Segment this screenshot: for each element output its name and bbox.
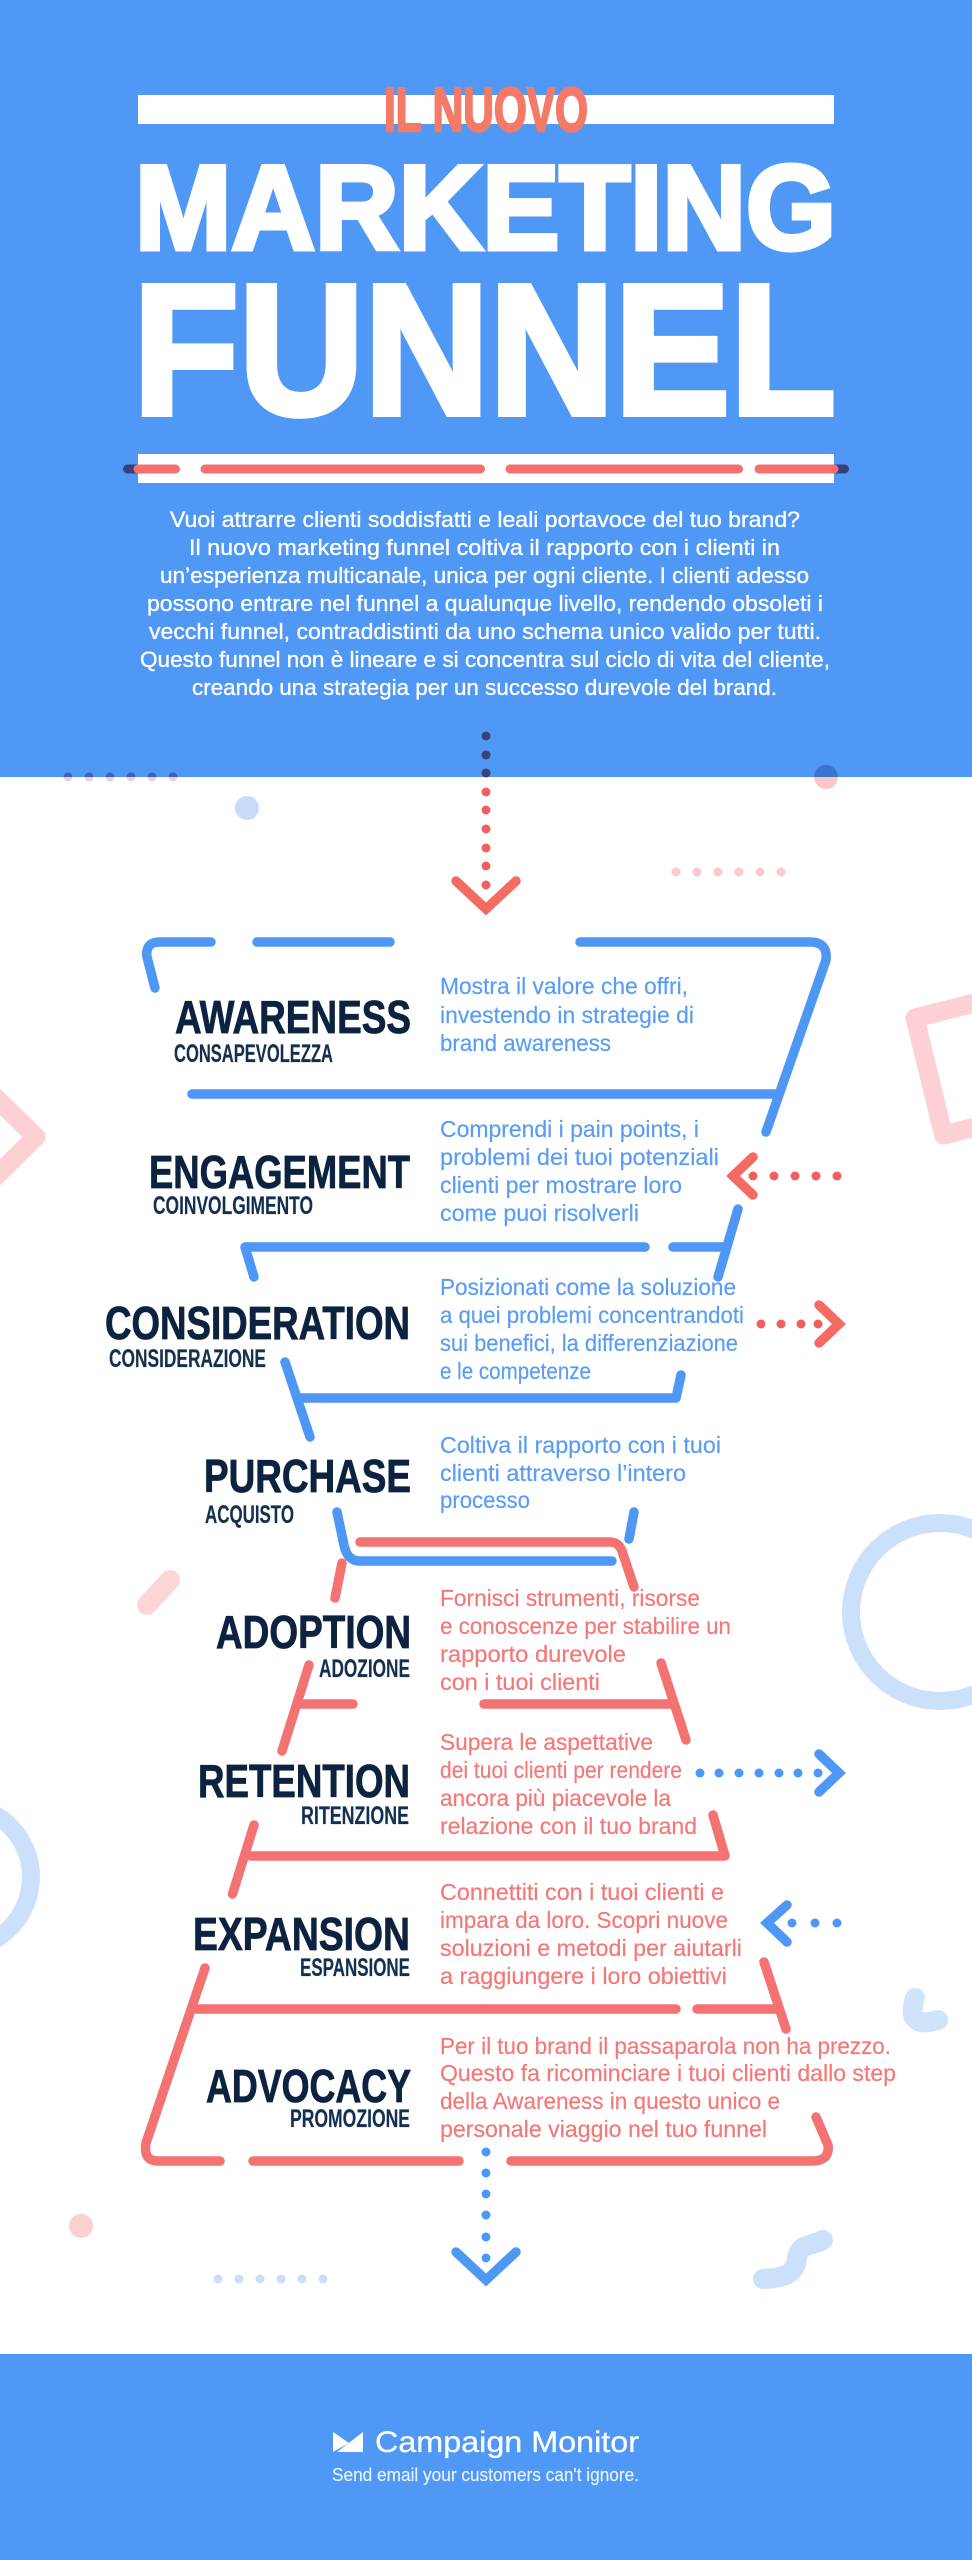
heading: engagement: ENGAGEMENT <box>149 1146 410 1198</box>
subheading: ritenzione: RITENZIONE <box>301 1802 409 1830</box>
icon: campaign monitor envelope <box>333 2432 363 2452</box>
subheading: promozione: PROMOZIONE <box>290 2105 410 2133</box>
title: il nuovo: IL NUOVO <box>384 76 588 145</box>
description: expansion: impara da loro. Scopri nuove <box>440 1907 728 1933</box>
heading: purchase: PURCHASE <box>204 1450 411 1502</box>
funnel outline: blue upper stages <box>147 942 826 1561</box>
brand name: Campaign Monitor <box>375 2426 639 2459</box>
tagline: Send email your customers can't ignore. <box>332 2465 639 2485</box>
title: marketing: MARKETING <box>135 141 836 275</box>
decoration: pale ring right <box>851 1523 972 1701</box>
description: purchase: Coltiva il rapporto con i tuoi <box>440 1432 721 1458</box>
decoration: pink slash <box>147 1580 170 1605</box>
title top white bar <box>138 95 834 124</box>
title block <box>128 76 844 483</box>
description: expansion: soluzioni e metodi per aiutarli <box>440 1935 742 1961</box>
decoration: pale blue circle upper left <box>235 796 259 820</box>
stage: advocacy <box>206 2033 896 2142</box>
description: adoption: rapporto durevole <box>440 1641 626 1667</box>
subheading: acquisto: ACQUISTO <box>205 1501 294 1529</box>
arrow: expansion blue pointing left <box>767 1905 842 1942</box>
description: consideration: sui benefici, la differenziazione <box>440 1330 738 1356</box>
intro paragraph: Questo funnel non è lineare e si concentra sul ciclo di vita del cliente, <box>140 647 830 672</box>
funnel outline: red lower stages <box>146 1542 828 2161</box>
heading: consideration: CONSIDERATION <box>105 1297 410 1349</box>
description: purchase: clienti attraverso l’intero <box>440 1460 686 1486</box>
description: engagement: problemi dei tuoi potenziali <box>440 1144 719 1170</box>
subheading: consapevolezza: CONSAPEVOLEZZA <box>174 1040 333 1068</box>
description: purchase: processo <box>440 1487 530 1513</box>
description: adoption: e conoscenze per stabilire un <box>440 1613 731 1639</box>
stage: purchase <box>204 1432 721 1529</box>
arrow: retention blue pointing right <box>696 1754 839 1792</box>
decoration: pink square outline <box>915 989 972 1135</box>
description: awareness: brand awareness <box>440 1030 611 1056</box>
intro paragraph: creando una strategia per un successo durevole del brand. <box>192 675 777 700</box>
description: consideration <box>440 1274 744 1384</box>
intro paragraph: Vuoi attrarre clienti soddisfatti e leali portavoce del tuo brand? <box>170 507 800 532</box>
description: advocacy: della Awareness in questo unico e <box>440 2088 780 2114</box>
stage: expansion <box>193 1879 742 1989</box>
arrow: top dotted arrow down <box>456 732 516 909</box>
heading: awareness: AWARENESS <box>175 991 411 1043</box>
description: engagement: come puoi risolverli <box>440 1200 639 1226</box>
description: awareness: Mostra il valore che offri, <box>440 973 688 999</box>
decoration: pale ring left <box>0 1805 31 1949</box>
heading: expansion: EXPANSION <box>193 1908 410 1960</box>
subheading: coinvolgimento: COINVOLGIMENTO <box>153 1192 313 1220</box>
description: engagement <box>440 1116 719 1226</box>
intro paragraph: possono entrare nel funnel a qualunque livello, rendendo obsoleti i <box>147 591 823 616</box>
stage: retention <box>198 1729 697 1839</box>
description: advocacy: Per il tuo brand il passaparola non ha prezzo. <box>440 2033 891 2059</box>
decoration: pale blue hook <box>913 1998 938 2022</box>
description: advocacy <box>440 2033 896 2142</box>
description: expansion <box>440 1879 742 1989</box>
arrow: engagement red pointing left <box>733 1157 842 1195</box>
decoration: pink chevron left <box>0 1094 36 1180</box>
arrow: bottom dotted arrow down <box>456 2148 516 2280</box>
decoration: pink dots <box>672 868 786 876</box>
description: awareness: investendo in strategie di <box>440 1002 694 1028</box>
stage: adoption <box>216 1585 731 1695</box>
description: purchase <box>440 1432 721 1513</box>
title bottom bar with dashes <box>128 454 844 483</box>
heading: adoption: ADOPTION <box>216 1606 411 1658</box>
decoration: dots on header edge <box>64 772 178 782</box>
stage: consideration <box>105 1274 744 1384</box>
description: consideration: e le competenze <box>440 1358 591 1384</box>
decoration: pale blue squiggle <box>763 2240 823 2279</box>
description: retention: Supera le aspettative <box>440 1729 653 1755</box>
description: retention: dei tuoi clienti per rendere <box>440 1757 682 1783</box>
description: advocacy: personale viaggio nel tuo funnel <box>440 2116 767 2142</box>
title: funnel: FUNNEL <box>133 247 836 454</box>
heading: advocacy: ADVOCACY <box>206 2060 411 2112</box>
subheading: espansione: ESPANSIONE <box>300 1954 410 1982</box>
intro paragraph: Il nuovo marketing funnel coltiva il rapporto con i clienti in <box>189 535 780 560</box>
description: engagement: clienti per mostrare loro <box>440 1172 682 1198</box>
description: awareness <box>440 973 694 1056</box>
decoration: circle on header edge <box>814 765 838 789</box>
panel: footer <box>0 2354 972 2560</box>
description: retention: ancora più piacevole la <box>440 1785 671 1811</box>
intro paragraph: vecchi funnel, contraddistinti da uno schema unico valido per tutti. <box>149 619 821 644</box>
description: retention: relazione con il tuo brand <box>440 1813 697 1839</box>
panel: header background <box>0 0 972 777</box>
decoration: pink circle lower left <box>69 2214 93 2238</box>
subheading: considerazione: CONSIDERAZIONE <box>109 1345 266 1373</box>
description: adoption <box>440 1585 731 1695</box>
description: expansion: a raggiungere i loro obiettivi <box>440 1963 727 1989</box>
intro paragraph <box>140 507 830 700</box>
description: adoption: Fornisci strumenti, risorse <box>440 1585 700 1611</box>
description: retention <box>440 1729 697 1839</box>
description: consideration: a quei problemi concentrandoti <box>440 1302 744 1328</box>
stage: engagement <box>149 1116 719 1226</box>
description: consideration: Posizionati come la soluzione <box>440 1274 736 1300</box>
decoration: pale blue dots <box>214 2274 328 2284</box>
description: advocacy: Questo fa ricominciare i tuoi clienti dallo step <box>440 2060 896 2086</box>
arrow: consideration red pointing right <box>756 1305 839 1343</box>
subheading: adozione: ADOZIONE <box>319 1655 410 1683</box>
heading: retention: RETENTION <box>198 1755 410 1807</box>
intro paragraph: un’esperienza multicanale, unica per ogni cliente. I clienti adesso <box>160 563 809 588</box>
description: adoption: con i tuoi clienti <box>440 1669 600 1695</box>
stage: awareness <box>174 973 694 1068</box>
description: engagement: Comprendi i pain points, i <box>440 1116 699 1142</box>
description: expansion: Connettiti con i tuoi clienti e <box>440 1879 724 1905</box>
